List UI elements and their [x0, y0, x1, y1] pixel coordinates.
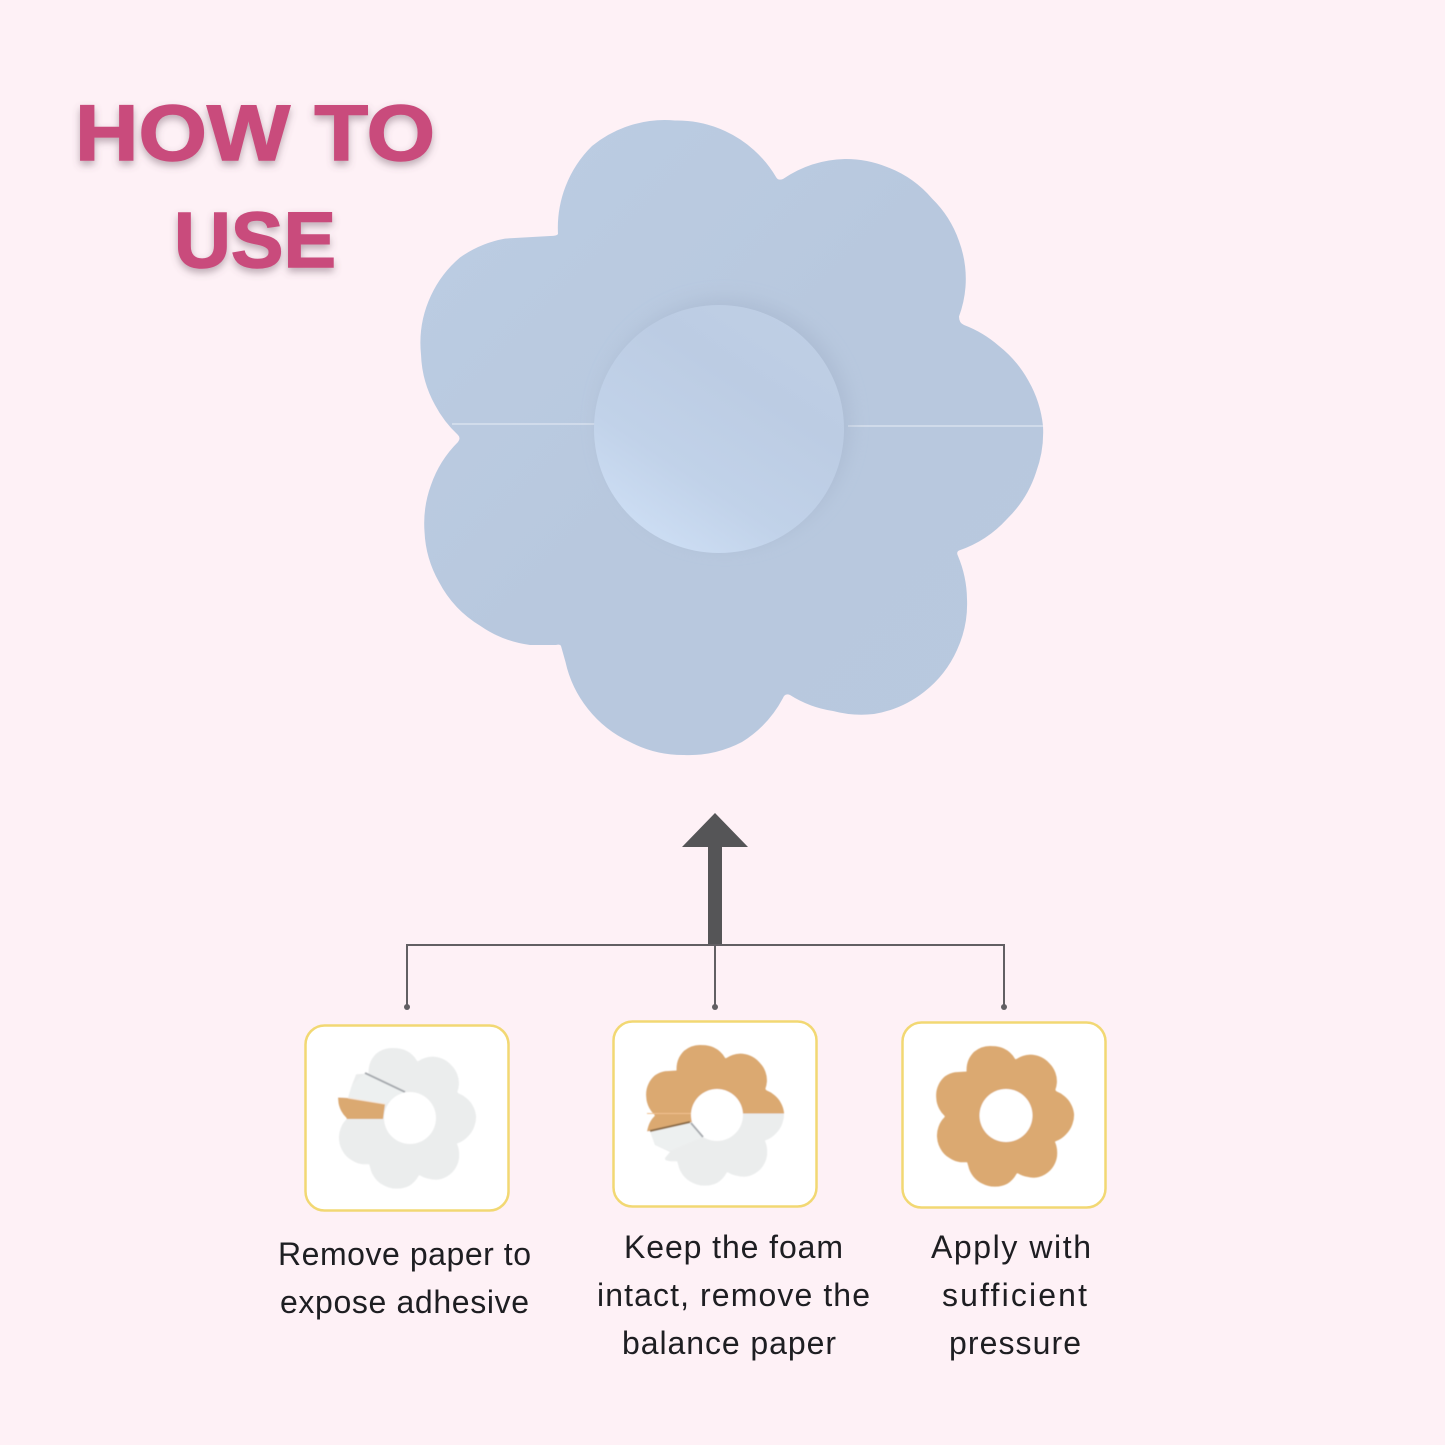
step 3 caption: Apply with — [931, 1229, 1091, 1265]
step 2 caption — [597, 1229, 870, 1361]
step 2 caption: intact, remove the — [597, 1277, 870, 1313]
step 1 card — [306, 1026, 508, 1210]
title: how to use: USE — [174, 195, 336, 284]
icon: flower with corner peeled — [330, 1048, 476, 1189]
product photo: flower nipple cover with foam centre — [420, 120, 1043, 755]
title: how to use: HOW TO — [75, 88, 435, 177]
connector lines — [404, 945, 1007, 1010]
arrow pointing up — [682, 813, 748, 946]
step 1 caption: expose adhesive — [280, 1284, 529, 1320]
step 3 caption — [931, 1229, 1091, 1361]
icon: flower half peeled — [640, 1045, 784, 1186]
step 2 caption: balance paper — [622, 1325, 836, 1361]
step 2 caption: Keep the foam — [624, 1229, 843, 1265]
step 3 card — [902, 1022, 1106, 1208]
title: how to use — [75, 88, 435, 284]
step 3 caption: sufficient — [942, 1277, 1087, 1313]
step 3 caption: pressure — [949, 1325, 1081, 1361]
step 1 caption: Remove paper to — [278, 1236, 531, 1272]
step 2 card — [614, 1022, 816, 1206]
step 1 caption — [278, 1236, 531, 1320]
icon: full adhesive flower — [936, 1046, 1074, 1187]
